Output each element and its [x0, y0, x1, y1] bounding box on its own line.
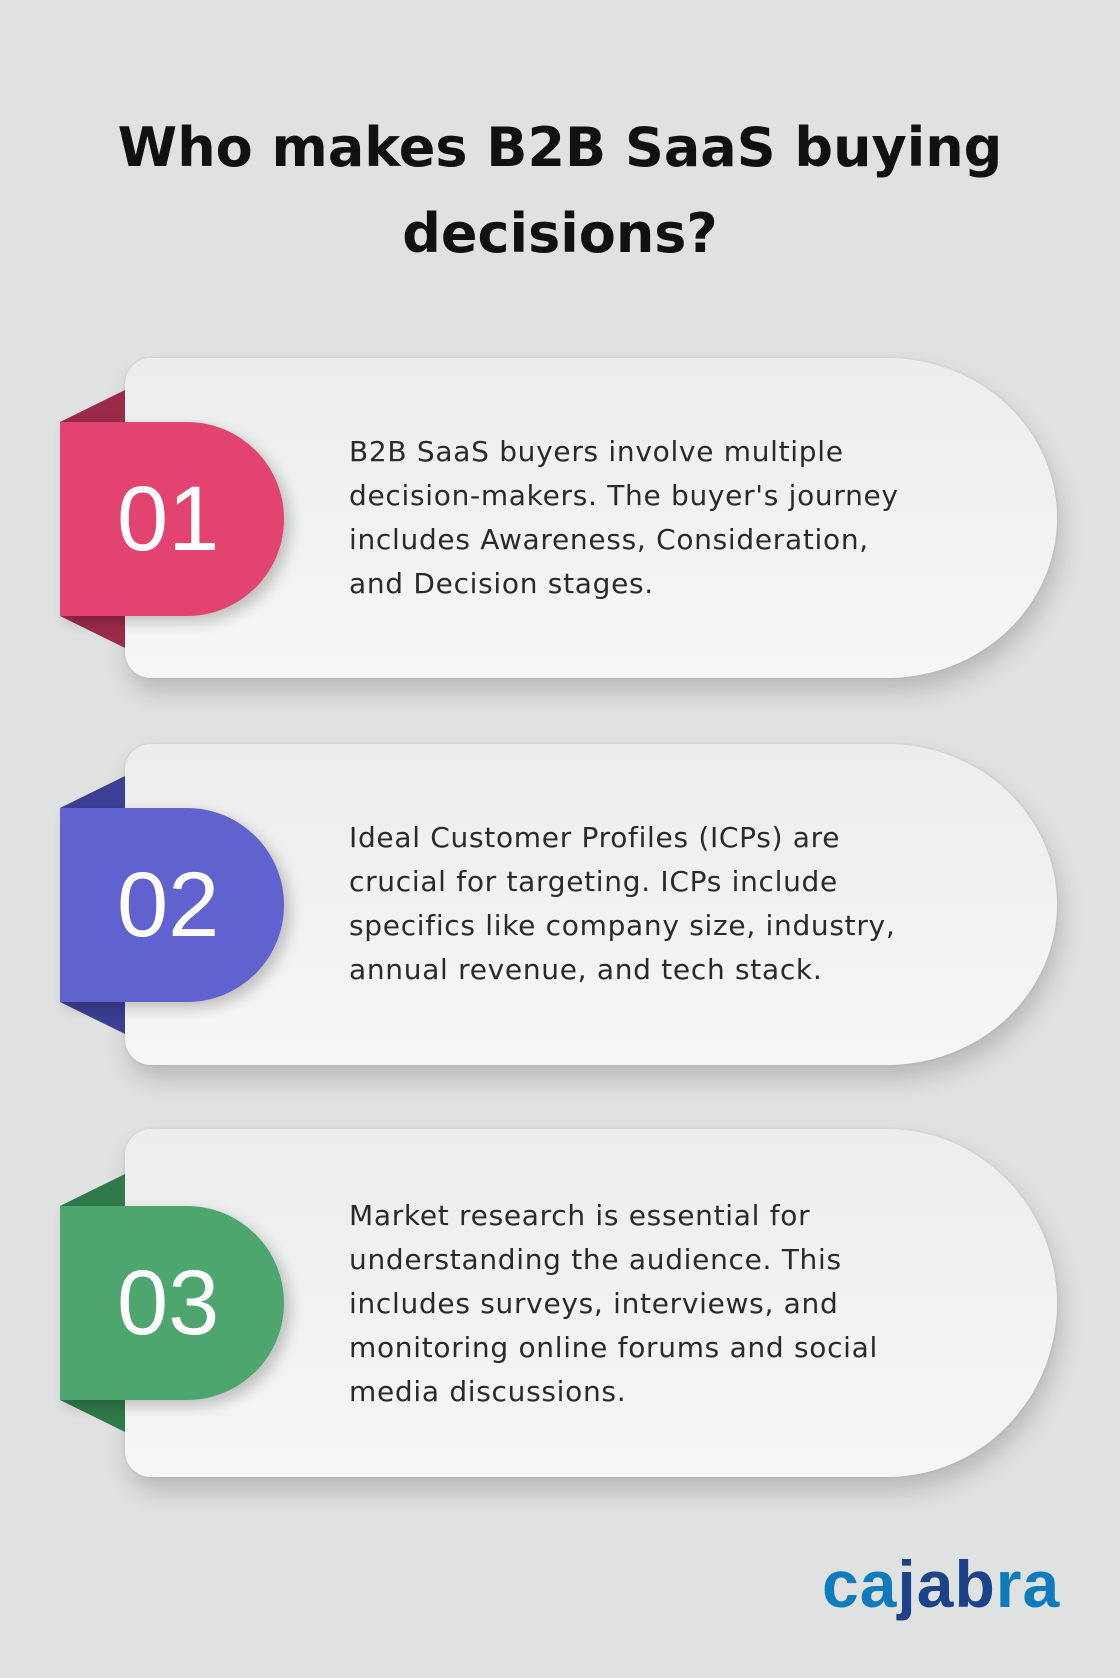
- title: [118, 116, 1002, 265]
- fold 2: [60, 776, 125, 1034]
- badge 01: 01: [117, 468, 219, 570]
- badge 02: 02: [117, 854, 219, 956]
- text 3: [349, 1199, 878, 1408]
- text 2: Ideal Customer Profiles (ICPs) are: [349, 821, 840, 854]
- panel: card 2: [125, 744, 1057, 1065]
- text 2: annual revenue, and tech stack.: [349, 953, 822, 986]
- text 1: [349, 435, 899, 600]
- text 3: understanding the audience. This: [349, 1243, 842, 1276]
- text 2: specifics like company size, industry,: [349, 909, 895, 942]
- fold 1: [60, 390, 125, 648]
- title: decisions?: [402, 202, 718, 265]
- text 3: Market research is essential for: [349, 1199, 810, 1232]
- panel: card 3: [125, 1129, 1057, 1477]
- title: Who makes B2B SaaS buying: [118, 116, 1002, 179]
- text 1: includes Awareness, Consideration,: [349, 523, 869, 556]
- text 3: media discussions.: [349, 1375, 626, 1408]
- text 1: and Decision stages.: [349, 567, 654, 600]
- text 3: includes surveys, interviews, and: [349, 1287, 838, 1320]
- text 3: monitoring online forums and social: [349, 1331, 878, 1364]
- text 2: [349, 821, 895, 986]
- badge 01: [60, 422, 284, 616]
- logo: cajabra: [822, 1547, 1060, 1621]
- badge 03: 03: [117, 1252, 219, 1354]
- panel: card 1: [125, 358, 1057, 678]
- badge 03: [60, 1206, 284, 1400]
- fold 3: [60, 1174, 125, 1432]
- text 2: crucial for targeting. ICPs include: [349, 865, 838, 898]
- text 1: B2B SaaS buyers involve multiple: [349, 435, 844, 468]
- text 1: decision-makers. The buyer's journey: [349, 479, 899, 512]
- badge 02: [60, 808, 284, 1002]
